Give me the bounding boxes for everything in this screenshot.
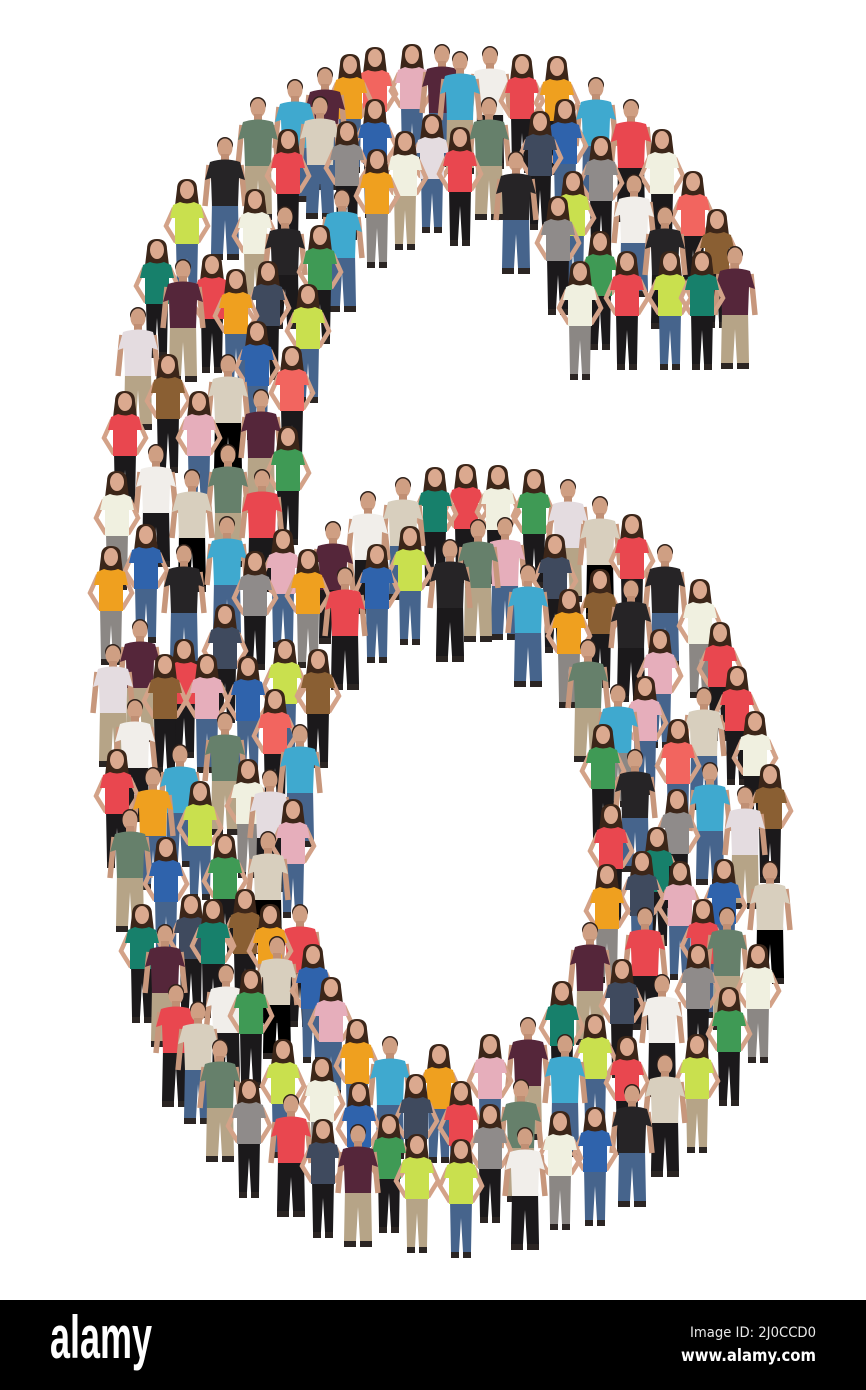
sides of the loop: people	[93, 604, 791, 984]
top of the loop: people	[90, 464, 721, 708]
footer bar	[0, 1300, 866, 1390]
alamy logo text: alamy	[50, 1304, 152, 1371]
figure: numeral 6 formed by a crowd of people	[90, 44, 791, 1258]
upper stroke of the six: people	[104, 44, 755, 567]
bottom of the loop: people	[121, 889, 779, 1258]
image id: Image ID: 2J0CCD0	[690, 1325, 816, 1341]
website: www.alamy.com	[681, 1346, 816, 1366]
